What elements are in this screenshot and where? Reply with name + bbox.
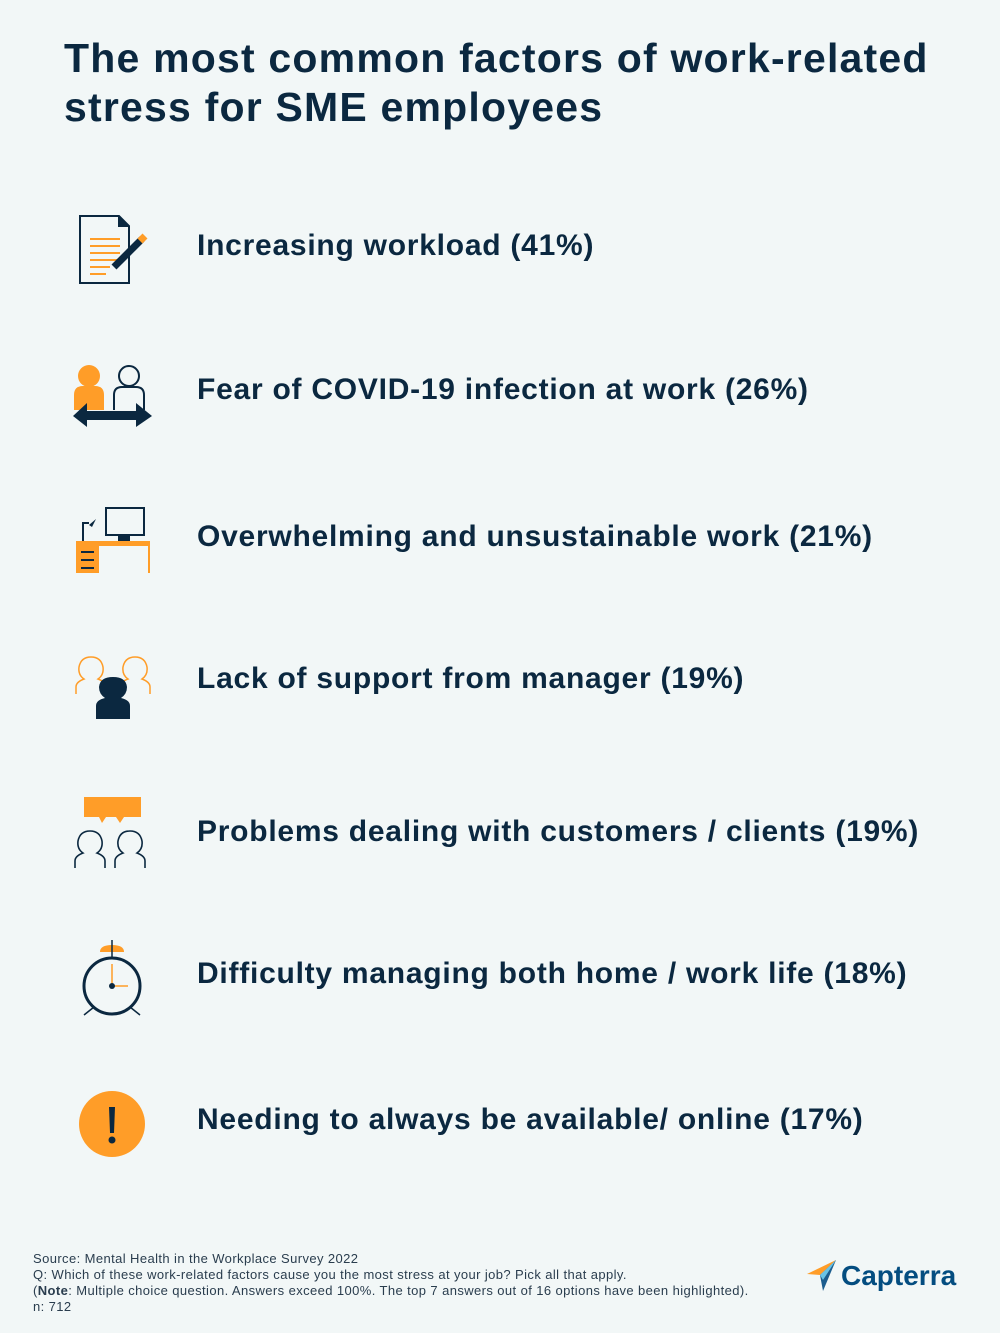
item 1: Increasing workload (41%)	[197, 229, 594, 262]
footer: source notes	[33, 1251, 749, 1314]
item 3: Overwhelming and unsustainable work (21%)	[197, 520, 873, 553]
icon: desk with computer	[76, 507, 150, 573]
item 6: Difficulty managing both home / work life (18%)	[197, 957, 907, 990]
logo: Capterra: Capterra	[841, 1260, 956, 1291]
footer: source notes: n: 712	[33, 1299, 72, 1314]
item 7: Needing to always be available/ online (17%)	[197, 1103, 864, 1136]
title: stress for SME employees	[64, 84, 603, 130]
footer: source notes: (Note: Multiple choice question. Answers exceed 100%. The top 7 answers out of 16 options have been highlighted).	[33, 1283, 749, 1298]
title	[64, 35, 929, 130]
icon: alarm clock	[82, 940, 142, 1016]
title: The most common factors of work-related	[64, 35, 929, 81]
icon: people with speech bubble	[74, 797, 146, 868]
icon: manager with team	[75, 656, 151, 719]
footer: source notes: Q: Which of these work-related factors cause you the most stress at your job? Pick all that apply.	[33, 1267, 627, 1282]
item 4: Lack of support from manager (19%)	[197, 662, 744, 695]
footer: source notes: Source: Mental Health in the Workplace Survey 2022	[33, 1251, 358, 1266]
item 2: Fear of COVID-19 infection at work (26%)	[197, 373, 809, 406]
icon: document with pencil	[79, 215, 148, 284]
icon: exclamation	[79, 1091, 145, 1157]
icon: people with arrow	[73, 365, 152, 427]
item 5: Problems dealing with customers / clients (19%)	[197, 815, 919, 848]
